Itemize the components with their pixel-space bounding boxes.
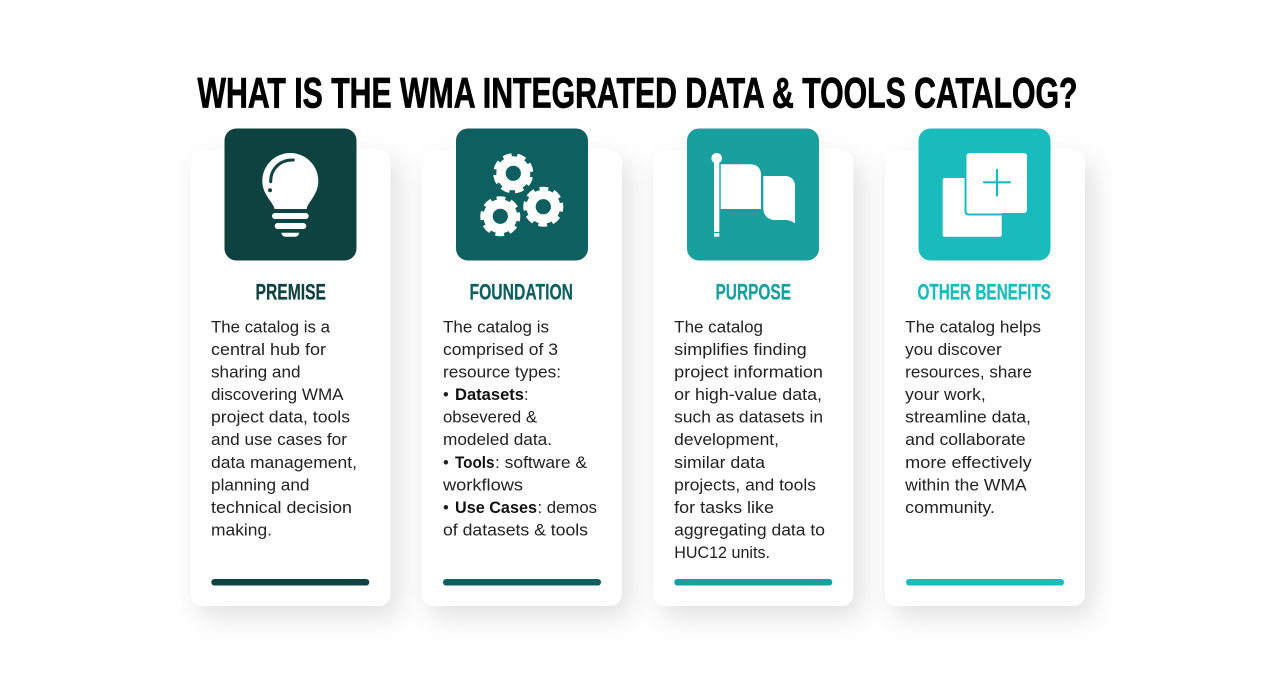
text block: premise — [211, 318, 357, 540]
text block: foundation: obsevered & — [443, 409, 537, 427]
text block: other benefits: within the WMA — [904, 476, 1027, 494]
text block: purpose: similar data — [674, 454, 766, 472]
text block: other benefits: community. — [905, 499, 995, 517]
accent bar — [674, 579, 832, 586]
text block: premise: data management, — [211, 454, 357, 472]
card background — [653, 150, 853, 606]
text block: foundation: Use Cases — [455, 499, 537, 517]
text block: purpose: or high-value data, — [674, 386, 822, 404]
card background — [885, 150, 1085, 606]
text block: foundation: workflows — [442, 476, 523, 494]
text block: purpose: HUC12 units. — [674, 544, 770, 562]
text block: other benefits: your work, — [905, 386, 986, 404]
accent bar — [906, 579, 1064, 586]
text block: foundation: • — [443, 499, 449, 517]
text block: premise: discovering WMA — [211, 386, 344, 404]
text block: purpose: aggregating data to — [674, 522, 825, 540]
text block: premise: central hub for — [211, 341, 327, 359]
text block: foundation: resource types: — [443, 364, 561, 382]
text block: purpose: such as datasets in — [674, 409, 823, 427]
text block: purpose: project information — [674, 364, 823, 382]
panel: foundation — [422, 128, 622, 606]
text block: premise: planning and — [211, 476, 310, 494]
text block: purpose: simplifies finding — [674, 341, 807, 359]
text block: purpose: for tasks like — [674, 499, 774, 517]
icon: overlapping squares with plus — [918, 128, 1050, 260]
text block: purpose — [674, 318, 825, 562]
panel: premise — [190, 128, 390, 606]
text block: foundation: : software & — [495, 454, 587, 472]
icon: flag — [687, 128, 819, 260]
text block: purpose: development, — [674, 431, 779, 449]
text block: premise: and use cases for — [211, 431, 348, 449]
icon: gears — [456, 128, 588, 260]
text block: other benefits: more effectively — [905, 454, 1033, 472]
text block: foundation: Datasets — [455, 386, 524, 404]
text block: foundation — [442, 318, 597, 540]
text block: other benefits: and collaborate — [905, 431, 1026, 449]
panel: purpose — [653, 128, 853, 606]
text block: purpose: projects, and tools — [674, 476, 816, 494]
accent bar — [443, 579, 601, 586]
text block: foundation: of datasets & tools — [443, 522, 588, 540]
text block: foundation: : demos — [538, 499, 597, 517]
heading: other benefits: OTHER BENEFITS — [918, 280, 1051, 305]
text block: foundation: : — [524, 386, 529, 404]
text block: premise: The catalog is a — [211, 318, 331, 336]
text block: foundation: • — [443, 454, 449, 472]
text block: other benefits: resources, share — [905, 364, 1032, 382]
text block: foundation: • — [443, 386, 449, 404]
card background — [422, 150, 622, 606]
text block: other benefits: The catalog helps — [905, 318, 1041, 336]
text block: premise: making. — [211, 522, 272, 540]
text block: other benefits: streamline data, — [905, 409, 1031, 427]
text block: foundation: modeled data. — [443, 431, 552, 449]
panel: other benefits — [885, 128, 1085, 606]
accent bar — [211, 579, 369, 586]
text block: premise: sharing and — [211, 364, 300, 382]
text block: premise: project data, tools — [211, 409, 350, 427]
heading: foundation: FOUNDATION — [470, 280, 573, 305]
text block: foundation: Tools — [455, 454, 494, 472]
icon: light bulb — [224, 128, 356, 260]
text block: foundation: The catalog is — [443, 318, 549, 336]
card background — [190, 150, 390, 606]
text block: foundation: comprised of 3 — [443, 341, 558, 359]
text block: other benefits: you discover — [905, 341, 1002, 359]
text block: premise: technical decision — [211, 499, 352, 517]
heading: purpose: PURPOSE — [716, 280, 791, 305]
text block: other benefits — [904, 318, 1041, 517]
heading: premise: PREMISE — [256, 280, 326, 305]
text block: purpose: The catalog — [674, 318, 763, 336]
